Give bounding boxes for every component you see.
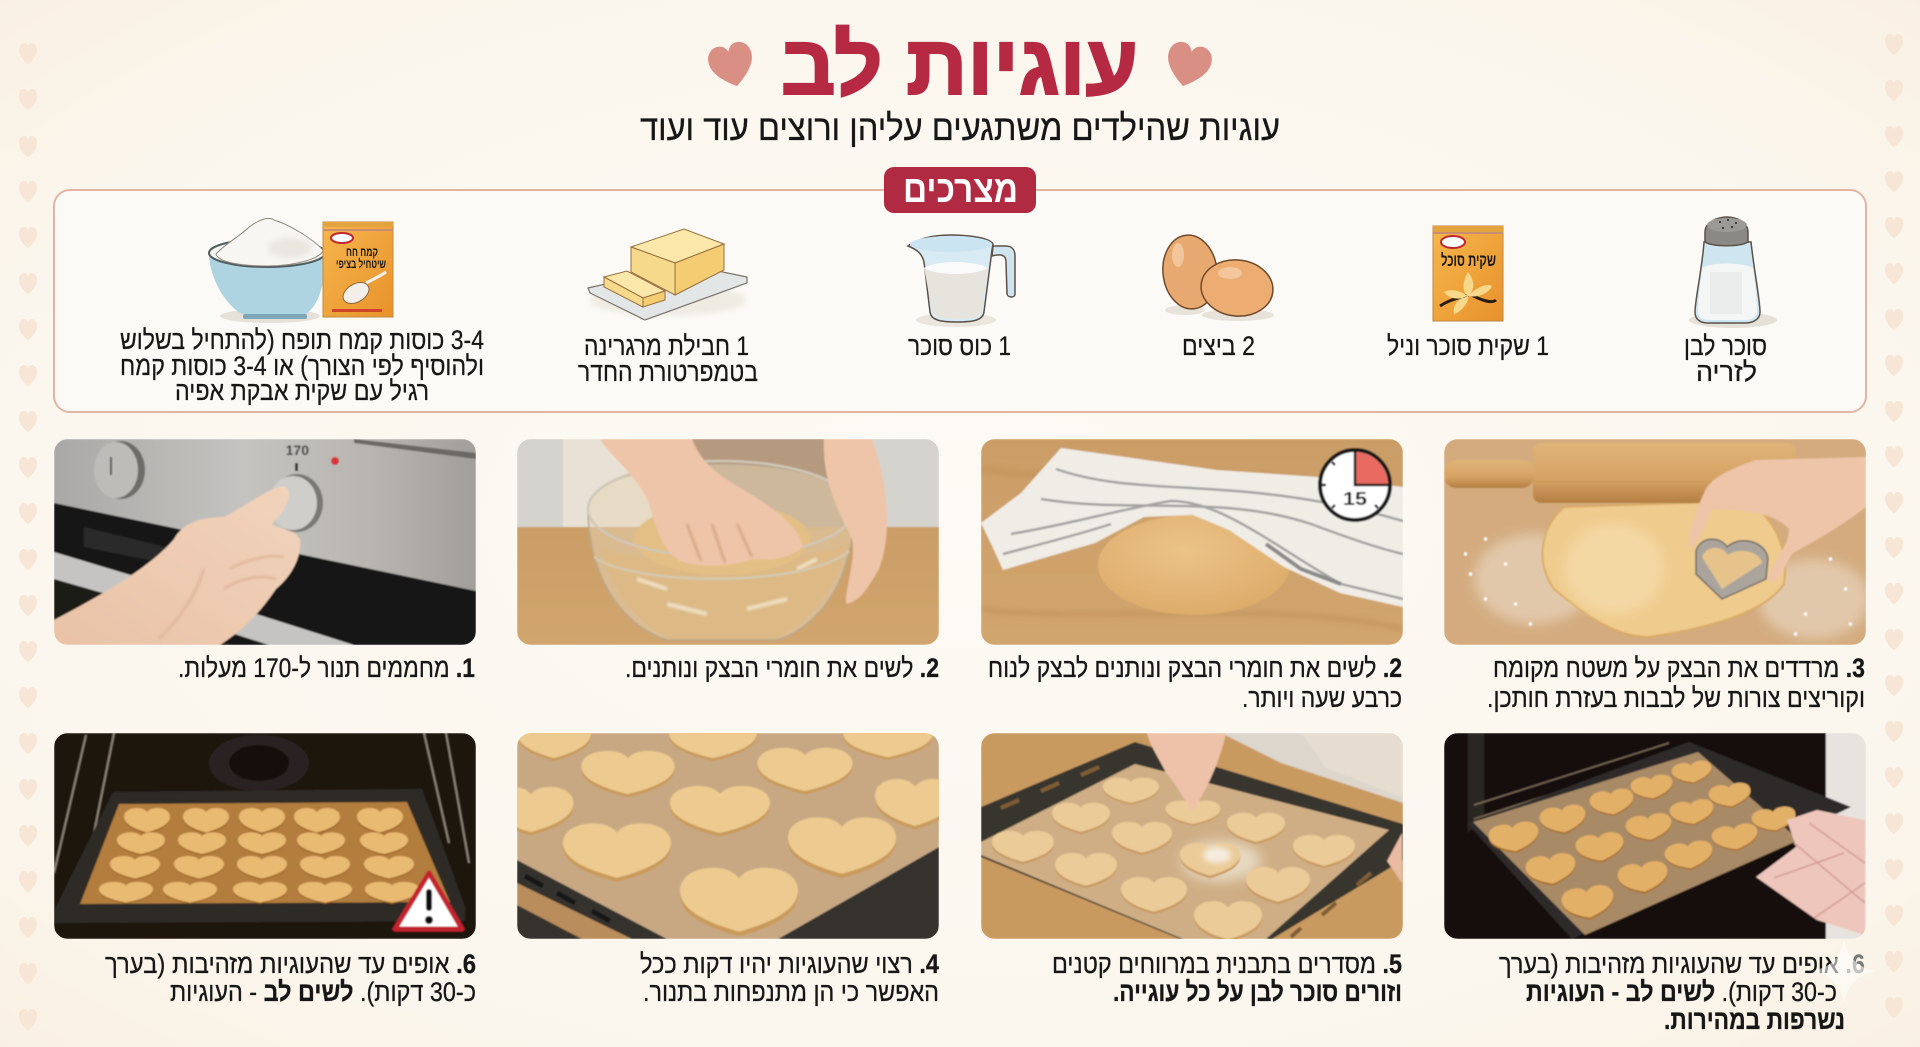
icon: baking powder packet: שיטחיל בציפי [336, 257, 386, 271]
icon: salt shaker [1689, 217, 1777, 328]
panel: ingredients [54, 167, 1866, 412]
icon: heart cookie cutter [1696, 539, 1768, 599]
caption: step 6 oven warning [105, 949, 476, 1007]
subtitle: עוגיות שהילדים משתגעים עליהן ורוצים עוד ועוד [640, 107, 1280, 148]
caption: step 3 [1487, 653, 1865, 713]
ingredient labels: לזריה [1696, 357, 1757, 387]
caption: step 3: וקוריצים צורות של לבבות בעזרת חותכן. [1487, 683, 1865, 713]
photo: hand turning oven knob [54, 439, 476, 645]
caption: step 6 bake: 6. אופים עד שהעוגיות מזהיבות (בערך [1499, 949, 1865, 979]
icon: eggs [1159, 232, 1276, 321]
photo: hand turning oven knob: 170 [286, 442, 309, 458]
caption: step 4 [640, 949, 939, 1007]
photo: pulling baked cookies from oven with mitt [1444, 733, 1866, 939]
caption: step 2 knead: 2. לשים את חומרי הבצק ונותנים. [625, 653, 939, 683]
ingredient labels: 2 ביצים [1182, 331, 1255, 361]
ingredient labels [120, 325, 1767, 406]
caption: step 6 oven warning: 6. אופים עד שהעוגיות מזהיבות (בערך [105, 949, 476, 979]
icon: flour bowl [209, 218, 326, 323]
photo: cutting heart from rolled dough [1444, 439, 1869, 645]
ingredient labels: סוכר לבן [1684, 331, 1767, 361]
ingredient labels: בטמפרטורת החדר [578, 357, 758, 387]
caption: step 2 rest [988, 653, 1402, 713]
decorative hearts right [1885, 34, 1903, 1018]
icon: baking powder packet [323, 222, 393, 317]
caption: step 4: האפשר כי הן מתנפחות בתנור. [643, 977, 939, 1007]
icon: measuring cup [908, 235, 1015, 327]
icon: margarine on plate [588, 229, 747, 320]
caption: step 6 bake: נשרפות במהירות. [1664, 1005, 1845, 1035]
caption: step 3: 3. מרדדים את הבצק על משטח מקומח [1493, 653, 1865, 683]
icon: 15 minute timer [1320, 450, 1390, 520]
ingredient labels: 3-4 כוסות קמח תופח (להתחיל בשלוש [120, 325, 484, 355]
caption: step 2 rest: 2. לשים את חומרי הבצק ונותנים לבצק לנוח [988, 653, 1402, 683]
photo: baked cookies in oven with warning sign [54, 733, 476, 939]
icon: vanilla sugar packet: שקית סוכל [1441, 251, 1496, 270]
badge: ingredients heading: מצרכים [903, 169, 1018, 211]
title: עוגיות לב [781, 18, 1138, 112]
caption: step 5 [1052, 949, 1402, 1007]
caption: step 2 rest: כרבע שעה ויותר. [1242, 683, 1402, 713]
ingredient labels: רגיל עם שקית אבקת אפיה [175, 376, 429, 406]
icon: sparkle watermark [1813, 939, 1875, 1003]
ingredient labels: 1 כוס סוכר [908, 331, 1011, 361]
caption: step 6 oven warning: כ-30 דקות). לשים לב - העוגיות [170, 977, 476, 1007]
photo: dough resting under towel with timer [981, 439, 1403, 645]
caption: step 6 bake [1499, 949, 1865, 1035]
caption: step 4: 4. רצוי שהעוגיות יהיו דקות ככל [640, 949, 939, 979]
photo: raw heart cookies on parchment [517, 733, 939, 939]
decorative hearts left [19, 43, 37, 1030]
icon: 15 minute timer: 15 [1343, 489, 1367, 509]
photo: kneading dough in glass bowl [517, 439, 939, 645]
icon: warning triangle [395, 873, 462, 929]
icon: heart right of title [1162, 39, 1215, 91]
ingredient labels: 1 חבילת מרגרינה [584, 331, 749, 361]
ingredient labels: 1 שקית סוכר וניל [1387, 331, 1549, 361]
photo: sprinkling sugar on cookies [981, 733, 1403, 943]
caption: step 5: וזורים סוכר לבן על כל עוגייה. [1113, 977, 1402, 1007]
caption: step 5: 5. מסדרים בתבנית במרווחים קטנים [1052, 949, 1402, 979]
icon: heart left of title [705, 39, 758, 91]
caption: step 1: 1. מחממים תנור ל-170 מעלות. [178, 653, 475, 683]
icon: baking powder packet: קמח חח [346, 245, 378, 259]
caption: step 6 bake: כ-30 דקות). לשים לב - העוגיות [1526, 977, 1837, 1007]
ingredient labels: ולהוסיף לפי הצורך) או 3-4 כוסות קמח [120, 351, 484, 381]
icon: vanilla sugar packet [1433, 226, 1503, 321]
